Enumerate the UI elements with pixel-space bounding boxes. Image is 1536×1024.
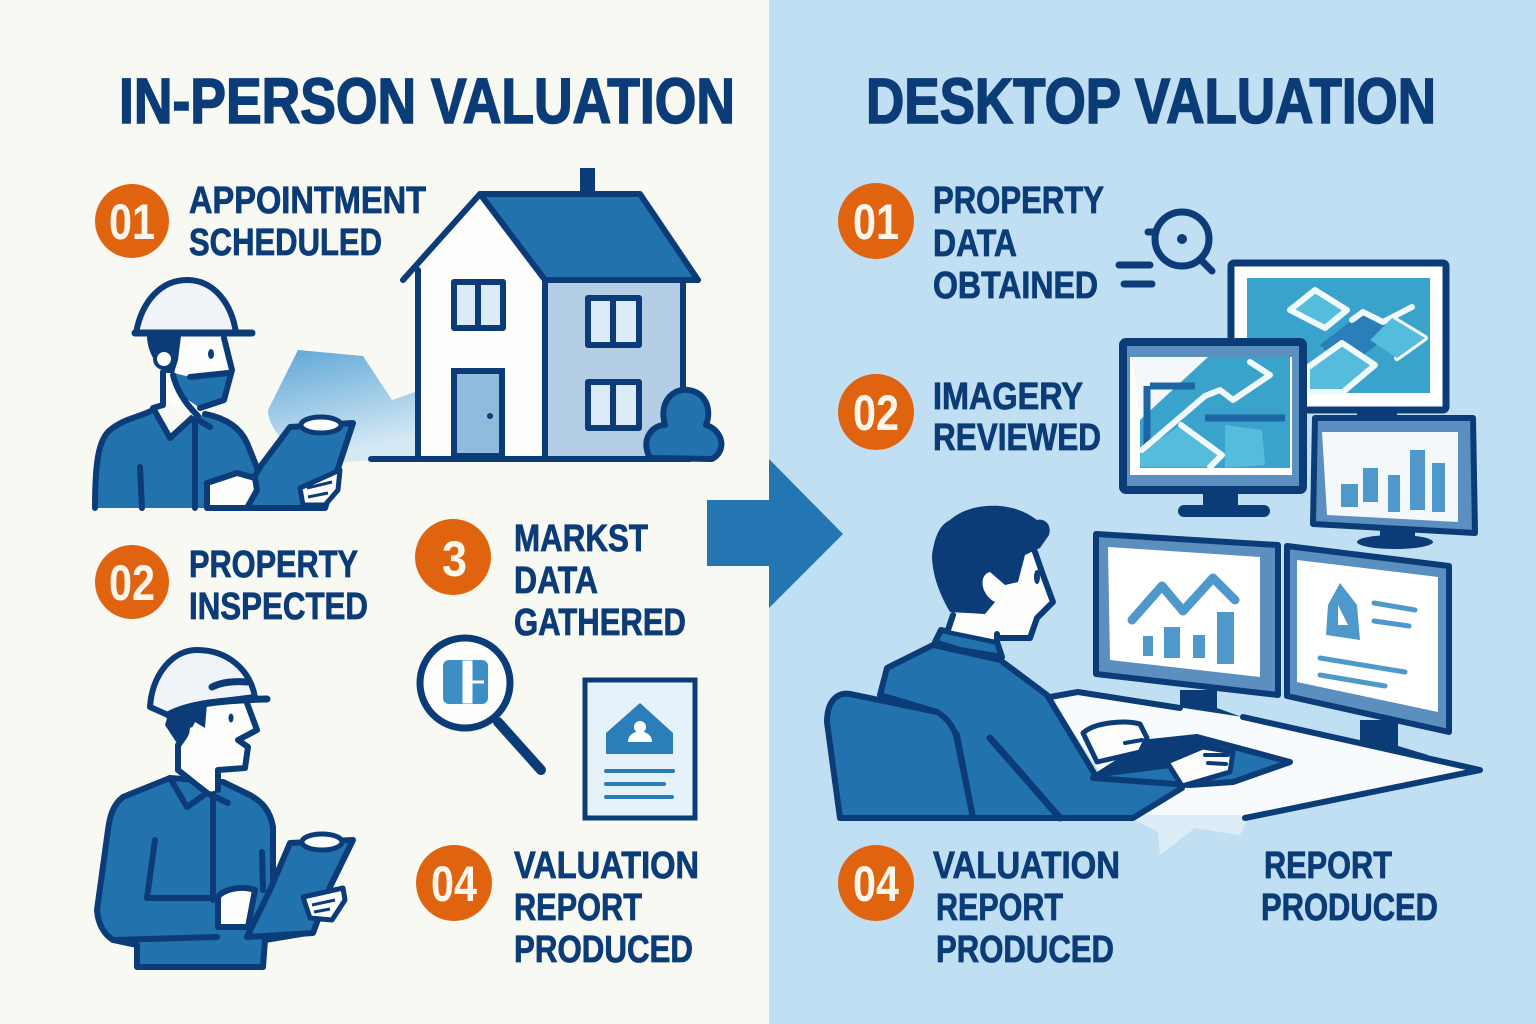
title: desktop valuation: DESKTOP VALUATION	[866, 65, 1436, 137]
step label: report produced: PRODUCED	[1261, 887, 1438, 929]
step label: valuation report produced: REPORT	[936, 887, 1063, 929]
step label: valuation report produced: REPORT	[514, 887, 642, 929]
monitor: bar chart	[1313, 418, 1475, 549]
step badge: desktop 04: 04	[853, 856, 899, 912]
step label: valuation report produced	[514, 845, 699, 971]
icon: search data	[1119, 212, 1212, 284]
step label: property data obtained: OBTAINED	[933, 265, 1098, 307]
step label: imagery reviewed	[933, 376, 1101, 459]
step label: imagery reviewed: REVIEWED	[933, 417, 1101, 459]
step label: property data obtained: PROPERTY	[933, 180, 1104, 222]
monitor: aerial map left	[1123, 342, 1303, 517]
illustration: analyst at desk	[827, 506, 1480, 855]
step label: property inspected: INSPECTED	[189, 586, 368, 628]
icon: magnifying glass	[420, 638, 541, 770]
step label: valuation report produced: VALUATION	[514, 845, 699, 887]
step badge: in-person 02: 02	[109, 555, 155, 611]
step label: imagery reviewed: IMAGERY	[933, 376, 1083, 418]
step badge: in-person 03	[415, 519, 491, 595]
arrow: in-person to desktop	[707, 459, 843, 608]
step label: property inspected: PROPERTY	[189, 544, 358, 586]
step badge: in-person 02	[95, 545, 169, 619]
step badge: desktop 02	[838, 374, 914, 450]
step badge: desktop 01	[838, 183, 914, 259]
step badge: in-person 01	[95, 184, 169, 258]
step badge: in-person 04: 04	[431, 856, 477, 912]
illustration: inspector with beard and clipboard	[95, 280, 353, 508]
step badge: in-person 03: 3	[442, 531, 467, 587]
panel: in-person valuation steps	[95, 168, 721, 971]
step label: market data gathered: DATA	[514, 560, 598, 602]
step badge: desktop 04	[838, 845, 914, 921]
step label: market data gathered: GATHERED	[514, 602, 686, 644]
illustration: inspector with clipboard	[97, 650, 353, 967]
step badge: desktop 01: 01	[853, 194, 899, 250]
step label: report produced: REPORT	[1264, 845, 1392, 887]
step label: appointment scheduled: SCHEDULED	[189, 222, 382, 264]
step badge: in-person 04	[416, 845, 492, 921]
step label: valuation report produced: PRODUCED	[514, 929, 693, 971]
monitor: property report	[1287, 546, 1449, 772]
panel: desktop valuation steps	[827, 180, 1480, 971]
step badge: in-person 01: 01	[109, 194, 155, 250]
step label: valuation report produced: PRODUCED	[936, 929, 1114, 971]
step label: property data obtained: DATA	[933, 223, 1017, 265]
monitor: line and bar chart	[1096, 534, 1278, 727]
icon: valuation report document	[585, 680, 695, 818]
step label: valuation report produced	[933, 845, 1120, 971]
illustration: house	[268, 168, 721, 462]
step label: property inspected	[189, 544, 368, 628]
step label: appointment scheduled: APPOINTMENT	[189, 180, 426, 222]
step badge: desktop 02: 02	[853, 385, 899, 441]
step label: report produced	[1261, 845, 1438, 929]
step label: property data obtained	[933, 180, 1104, 307]
step label: market data gathered: MARKST	[514, 518, 648, 560]
step label: market data gathered	[514, 518, 686, 644]
step label: appointment scheduled	[189, 180, 426, 264]
step label: valuation report produced: VALUATION	[933, 845, 1120, 887]
monitor: aerial map top right	[1231, 263, 1446, 418]
title: in-person valuation: IN-PERSON VALUATION	[119, 65, 735, 137]
